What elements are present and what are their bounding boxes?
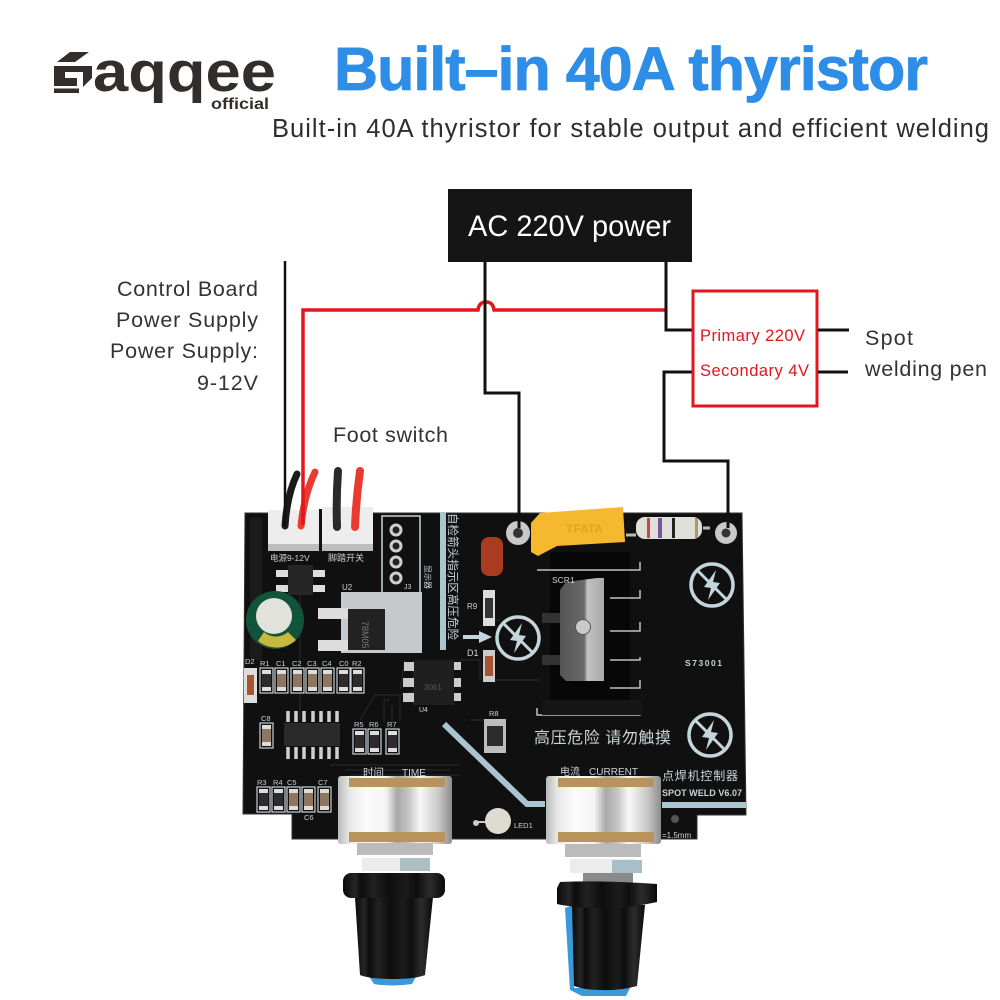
- header: J3: J3: [404, 584, 412, 591]
- component: SCR thyristor: SCR1: [552, 575, 575, 585]
- vertical silkscreen text: 自检箭头指示区高压危险: [446, 513, 460, 640]
- component row: SMD parts: R1: [260, 659, 270, 668]
- component: SCR thyristor: [552, 575, 604, 681]
- divider between connectors: [319, 509, 322, 549]
- text: spot welding pen: welding pen: [864, 357, 987, 381]
- logo: Gaqqee official: [54, 40, 276, 113]
- wire: black AC to primary: [666, 262, 692, 330]
- component: small transistor: [276, 565, 325, 595]
- component row: SMD parts: C1: [276, 659, 286, 668]
- component: U4 optocoupler: 3061: [424, 683, 442, 692]
- panel: PCB control board: =1.5mm: [662, 831, 691, 840]
- component: R9 and D1: [467, 590, 495, 682]
- component row: SMD parts: C3: [307, 659, 317, 668]
- component row: SMD parts: C7: [318, 778, 328, 787]
- component: electrolytic capacitor: [246, 591, 304, 649]
- panel: PCB control board: 显示器: [423, 565, 432, 589]
- potentiometer and knob: current: [546, 776, 661, 996]
- wires: cable tails: [285, 471, 360, 527]
- component: U2 regulator 78M05: U2: [342, 583, 353, 592]
- potentiometer and knob: time: [338, 776, 452, 986]
- wire: black AC to board: [485, 262, 519, 528]
- text: control board power supply: Control Board: [117, 277, 258, 301]
- component row: SMD parts: R5: [354, 720, 364, 729]
- panel: transformer box: Primary 220V: [700, 327, 805, 345]
- subtitle: Built-in 40A thyristor for stable output and efficient welding: [272, 115, 989, 143]
- board code: S73001: [685, 658, 722, 668]
- component row: SMD parts: R7: [387, 720, 397, 729]
- panel: transformer box: Secondary 4V: [700, 362, 809, 380]
- icon: no shock top right: [691, 564, 733, 606]
- mounting hole right: [715, 522, 737, 544]
- panel: PCB control board: 脚踏开关: [328, 552, 364, 563]
- text: control board power supply: Power Supply:: [110, 339, 258, 363]
- mounting hole left: [506, 521, 530, 545]
- component: U4 optocoupler: [403, 660, 461, 714]
- component: power resistor: [626, 517, 710, 539]
- component: LED: [473, 808, 533, 834]
- wire: black power supply: [284, 261, 286, 526]
- component row: SMD parts: R3: [257, 778, 267, 787]
- text: control board power supply: 9-12V: [197, 371, 259, 395]
- pot labels: CURRENT: [589, 767, 638, 778]
- text: spot welding pen: [864, 326, 987, 381]
- board title: 点焊机控制器: [662, 768, 738, 783]
- component row: SMD parts: R6: [369, 720, 379, 729]
- board title: SPOT WELD V6.07: [662, 788, 742, 798]
- logo: Gaqqee official: official: [211, 96, 269, 113]
- panel: PCB control board: 电源9-12V: [270, 553, 310, 563]
- icon: no shock bottom right: [689, 714, 731, 756]
- connector: foot switch: [322, 507, 373, 551]
- icon: no shock left: [497, 617, 539, 659]
- component: R9 and D1: R9: [467, 602, 478, 611]
- panel: transformer box: [693, 291, 817, 406]
- panel: AC 220V power box: [448, 189, 692, 262]
- header: J3: [382, 516, 420, 592]
- wire: red power supply: [303, 302, 666, 525]
- component: yellow capacitor: [531, 507, 625, 556]
- pot labels: [363, 765, 638, 779]
- component row: SMD parts: C5: [287, 778, 297, 787]
- pot labels: 时间: [363, 766, 384, 779]
- component: LED: LED1: [514, 821, 533, 830]
- component: R8: R8: [489, 709, 499, 718]
- component row: SMD parts: R4: [273, 778, 283, 787]
- text: foot switch: Foot switch: [333, 423, 448, 447]
- connector: power: [268, 510, 319, 551]
- component row: SMD parts: D2: [245, 657, 255, 666]
- component: U4 optocoupler: U4: [419, 707, 428, 714]
- wire: black secondary to board: [664, 372, 728, 528]
- arrow: [463, 631, 492, 643]
- component row: SMD parts: C8: [261, 714, 271, 723]
- trace: light-blue high voltage divider: [443, 512, 746, 805]
- text: control board power supply: Power Supply: [116, 308, 258, 332]
- component: R9 and D1: D1: [467, 648, 479, 658]
- board title: [662, 768, 742, 798]
- component: U2 regulator 78M05: 78M05: [360, 621, 370, 649]
- component row: SMD parts: C4: [322, 659, 332, 668]
- wire: output top: [818, 328, 849, 332]
- pot labels: TIME: [402, 768, 426, 779]
- component: R8: [484, 709, 506, 753]
- component row: SMD parts: C2: [292, 659, 302, 668]
- component row: SMD parts: C6: [304, 813, 314, 822]
- title: Built–in 40A thyristor: [334, 35, 928, 103]
- pot labels: 电流: [560, 765, 580, 778]
- component: yellow capacitor: TFATA: [566, 522, 603, 536]
- text: control board power supply: [110, 277, 259, 395]
- component: SOP IC: [284, 711, 340, 759]
- component row: SMD parts: C0: [339, 659, 349, 668]
- wire: output bottom: [818, 370, 848, 374]
- component row: SMD parts: [244, 657, 399, 822]
- component: red capacitor: [481, 537, 503, 576]
- component: heatsink: [537, 552, 642, 715]
- logo: Gaqqee official: aqqee: [93, 40, 276, 104]
- panel: PCB control board: [243, 507, 746, 840]
- component row: SMD parts: R2: [352, 659, 362, 668]
- warning text: 高压危险 请勿触摸: [534, 729, 671, 747]
- panel: AC 220V power box: AC 220V power: [468, 210, 671, 243]
- component: U2 regulator 78M05: [318, 583, 422, 653]
- text: spot welding pen: Spot: [865, 326, 913, 350]
